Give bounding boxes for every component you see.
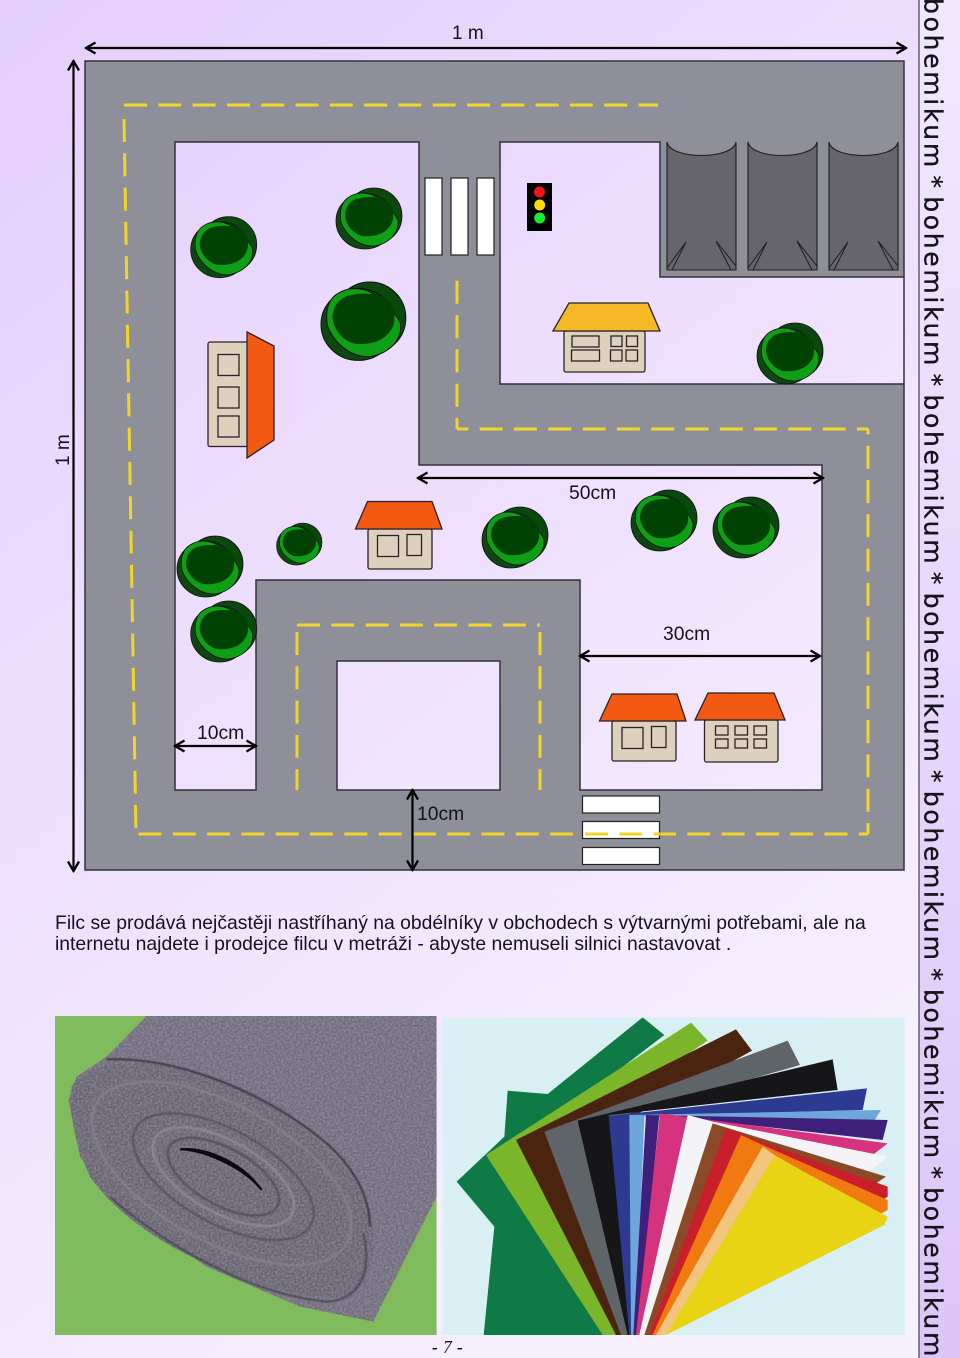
10cm horizontal: 10cm: [197, 723, 244, 744]
photo: coloured felt sheets: [443, 1017, 905, 1335]
house: sideways orange roof: [208, 332, 274, 458]
house: bottom left orange roof: [600, 694, 686, 761]
10cm horizontal: [175, 723, 256, 746]
house: centre orange roof: [356, 502, 442, 569]
roll hole: [180, 1149, 262, 1190]
description text: [55, 912, 866, 955]
yellow line over crossing: [585, 832, 660, 836]
sidebar: repeated bohemikum band: [918, 0, 960, 1358]
10cm vertical: [412, 790, 464, 870]
traffic light: [527, 183, 552, 231]
description text: internetu najdete i prodejce filcu v metráži - abyste nemuseli silnici nastavovat .: [55, 933, 731, 955]
yellow lane markings: [124, 105, 868, 834]
roll front face: [63, 1044, 380, 1303]
dimension arrows and labels: [53, 23, 906, 871]
house: yellow roof: [553, 303, 660, 372]
10cm vertical: 10cm: [417, 804, 464, 825]
30cm: 30cm: [663, 624, 710, 645]
road surface: [85, 61, 904, 870]
house: bottom right orange roof: [695, 693, 785, 762]
sidebar: repeated bohemikum band: bohemikum * bohemikum * bohemikum * bohemikum * bohemikum * bohemikum * bohemikum: [918, 0, 948, 1358]
1 m vertical: 1 m: [53, 434, 74, 466]
photo: grey felt roll: [55, 1016, 437, 1335]
roll body: [68, 1016, 437, 1322]
road map: [85, 61, 904, 870]
50cm: 50cm: [569, 483, 616, 504]
description text: Filc se prodává nejčastěji nastříhaný na obdélníky v obchodech s výtvarnými potřebami, ale na: [55, 912, 866, 934]
top pedestrian crossing: [425, 178, 494, 255]
bottom pedestrian crossing: [582, 796, 660, 864]
felt fan: [457, 1017, 888, 1335]
1 m horizontal: 1 m: [452, 23, 484, 44]
trees: [177, 188, 823, 662]
page number: - 7 -: [432, 1337, 463, 1357]
parking spaces: [667, 142, 898, 270]
